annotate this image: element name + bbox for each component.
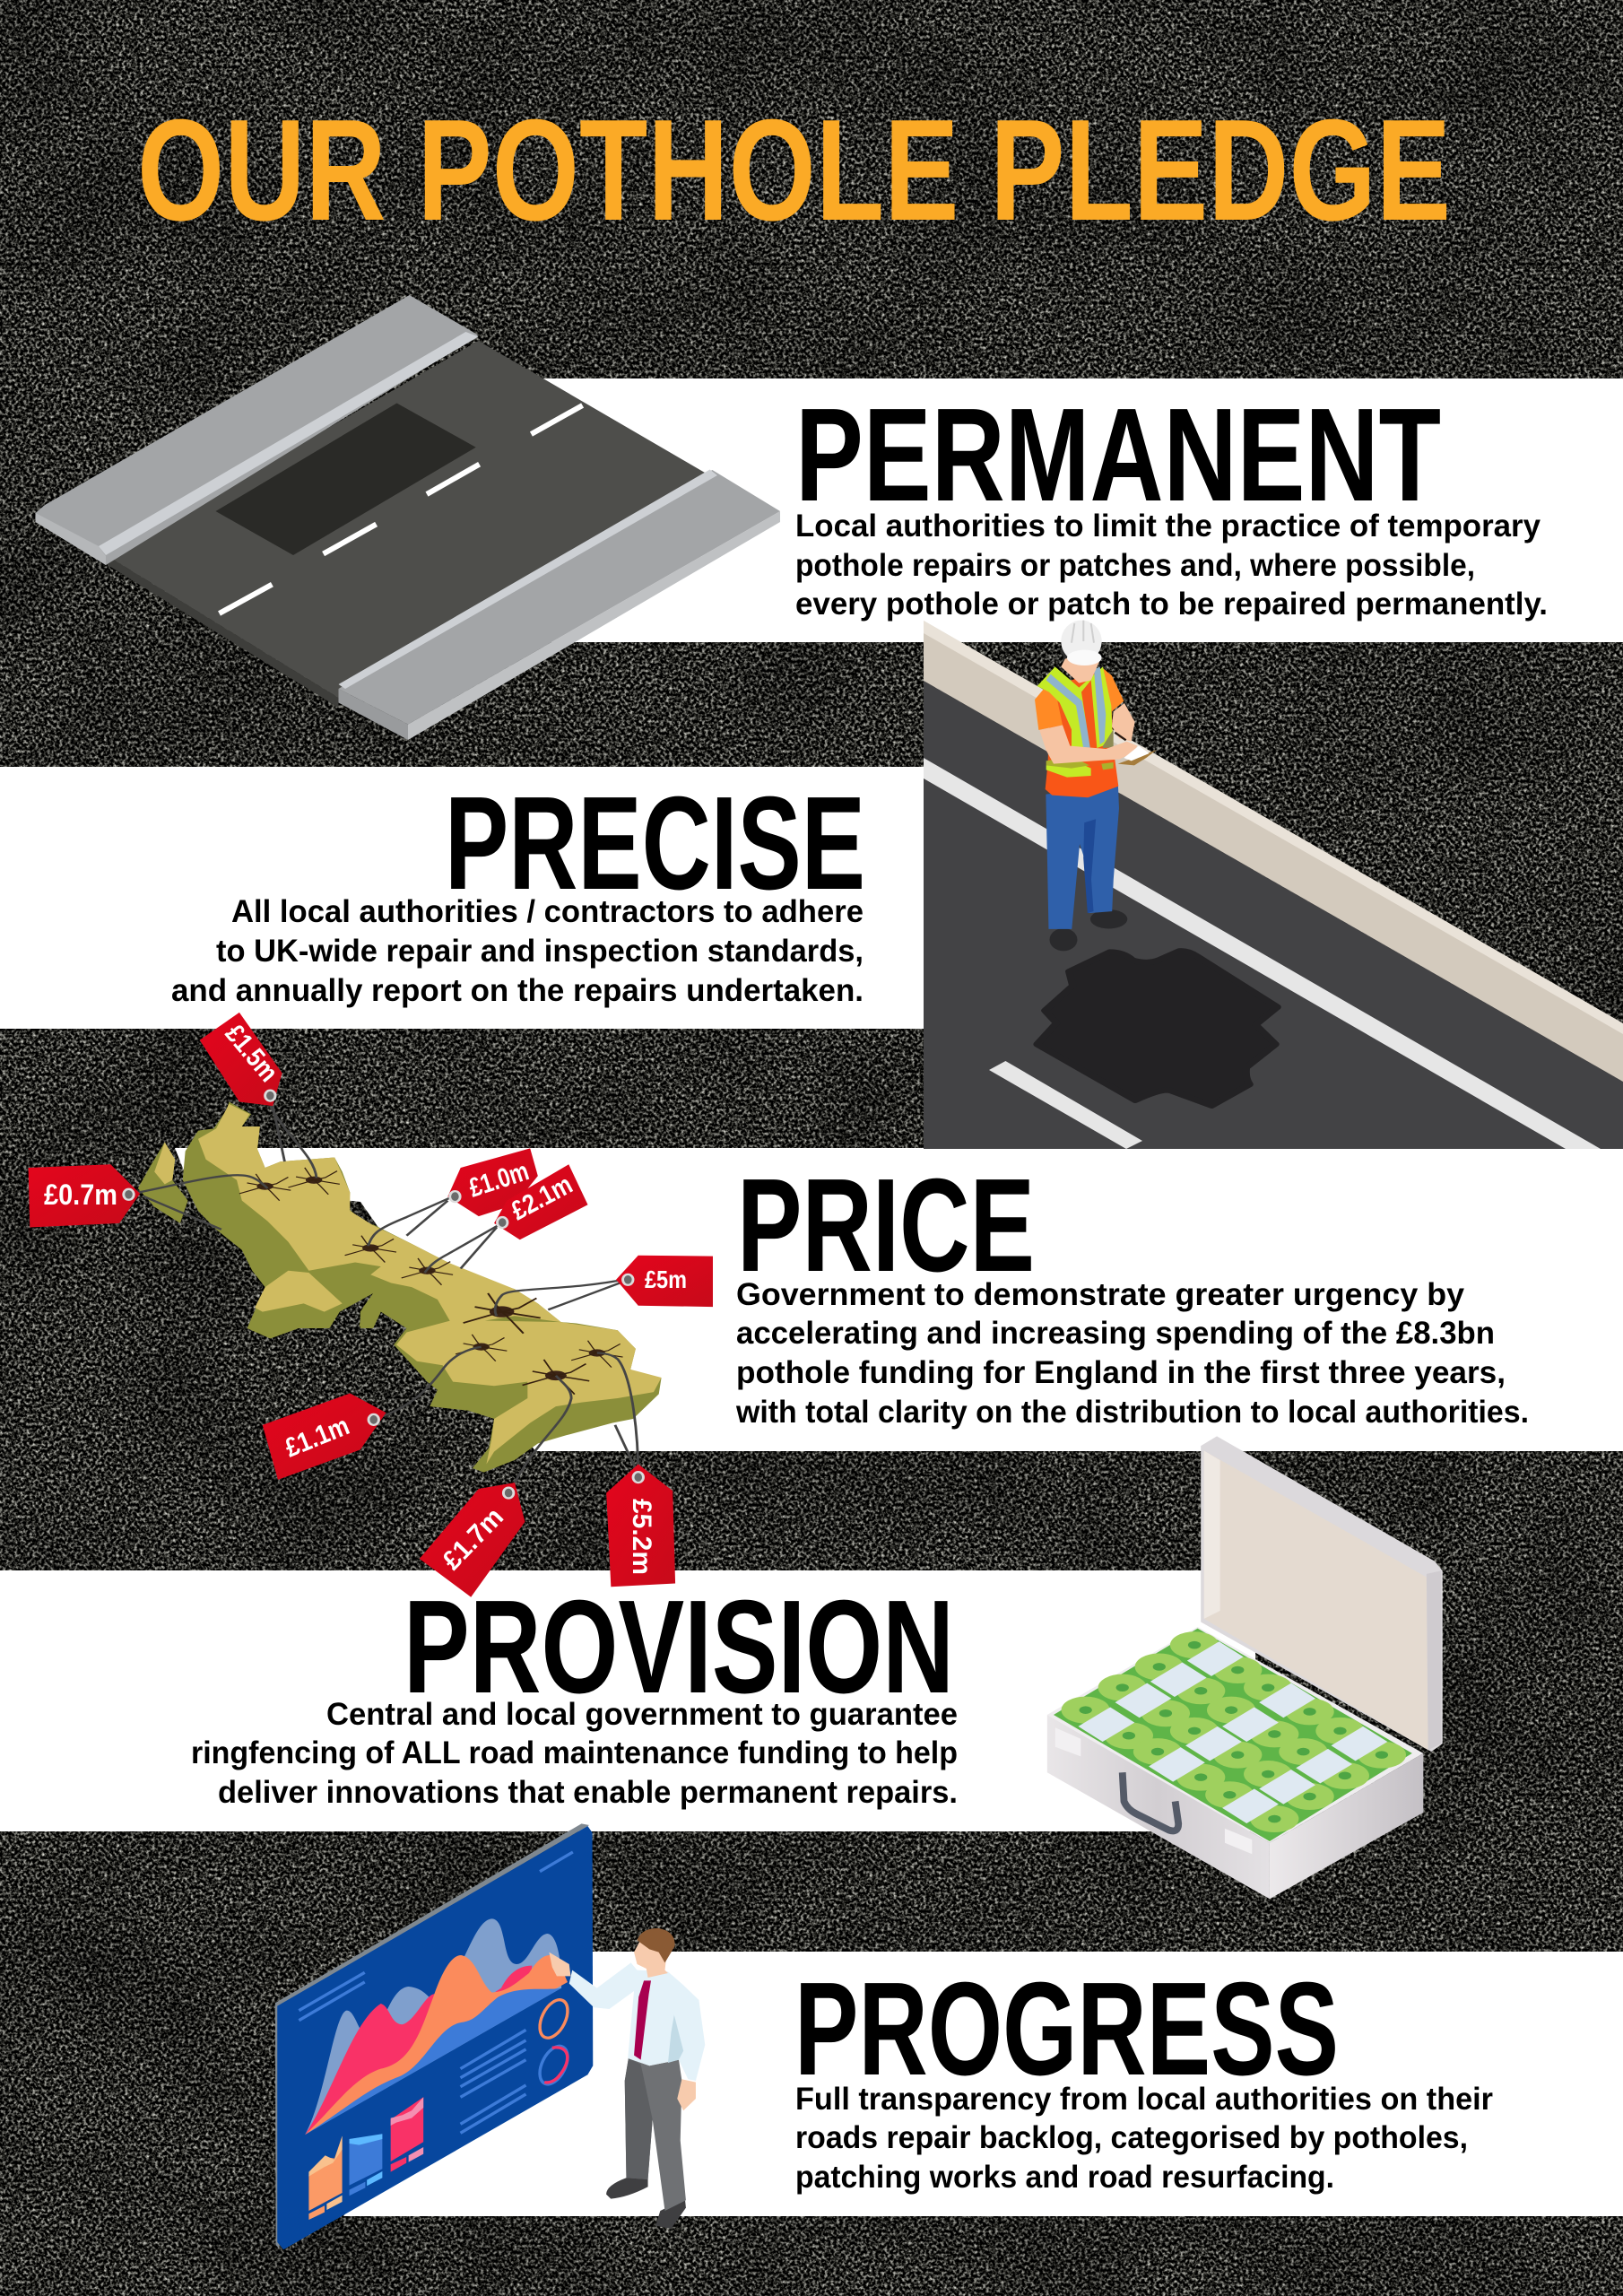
- tag eyelets: [124, 1091, 643, 1499]
- price tag labels: £5m: [645, 1265, 687, 1293]
- text: progress body: [795, 2082, 1493, 2195]
- text: precise body: and annually report on the repairs undertaken.: [171, 973, 864, 1008]
- case lid: [1201, 1436, 1443, 1752]
- tag strings: [129, 1106, 638, 1493]
- map: outer hebrides: [138, 1143, 188, 1223]
- case base: [1047, 1627, 1423, 1843]
- money: [1054, 1629, 1412, 1841]
- dashboard screen: [275, 1823, 593, 2249]
- price tag shapes: [29, 1013, 713, 1597]
- presenter: [549, 1928, 705, 2229]
- mini charts: [308, 2097, 423, 2220]
- text: progress body: roads repair backlog, categorised by potholes,: [795, 2120, 1468, 2155]
- text: permanent body: every pothole or patch to be repaired permanently.: [795, 587, 1548, 622]
- text: precise body: to UK-wide repair and inspection standards,: [216, 934, 864, 969]
- price tag labels: £5.2m: [627, 1499, 656, 1575]
- price tag labels: £0.7m: [44, 1178, 117, 1211]
- road: [924, 681, 1623, 1149]
- illustration: UK map with price tags: [29, 1013, 713, 1597]
- panel: permanent: [538, 378, 1623, 642]
- text: provision body: ringfencing of ALL road maintenance funding to help: [191, 1735, 958, 1770]
- heading: provision: PROVISION: [404, 1573, 954, 1721]
- text: precise body: [171, 894, 864, 1008]
- text: price body: [735, 1277, 1529, 1430]
- text: permanent body: [795, 509, 1548, 622]
- heading: progress: PROGRESS: [794, 1955, 1339, 2103]
- ring gauges: [534, 1996, 573, 2089]
- text: progress body: Full transparency from local authorities on their: [795, 2082, 1493, 2117]
- price tag labels: £1.5m: [220, 1019, 283, 1088]
- worker: [1035, 621, 1157, 951]
- road dashes: [219, 405, 583, 613]
- patch: [215, 404, 476, 555]
- text: price body: with total clarity on the distribution to local authorities.: [735, 1395, 1529, 1430]
- illustration: presenter at dashboard screen: [275, 1823, 705, 2249]
- worker legs: [1046, 786, 1127, 951]
- panel: precise: [0, 767, 933, 1029]
- text: permanent body: pothole repairs or patches and, where possible,: [795, 548, 1475, 583]
- panel: provision: [0, 1570, 1255, 1831]
- text: provision body: deliver innovations that enable permanent repairs.: [218, 1775, 958, 1810]
- area chart: [305, 1918, 568, 2135]
- price tag labels: [44, 1019, 687, 1576]
- illustration: road inspector and pothole: [924, 621, 1623, 1149]
- map: cracks: [239, 1168, 623, 1395]
- map: great britain and ireland: [183, 1102, 662, 1473]
- heading: price: PRICE: [737, 1152, 1035, 1300]
- worker torso: [1035, 621, 1157, 797]
- panel: progress: [343, 1952, 1623, 2216]
- text: price body: pothole funding for England in the first three years,: [736, 1355, 1506, 1390]
- heading: precise: PRECISE: [445, 770, 865, 918]
- pothole: [1037, 951, 1278, 1106]
- text: permanent body: Local authorities to limit the practice of temporary: [795, 509, 1541, 544]
- text: provision body: Central and local government to guarantee: [326, 1697, 958, 1732]
- price tag labels: £2.1m: [507, 1170, 577, 1226]
- text lines: [299, 1852, 573, 2133]
- text: provision body: [191, 1697, 958, 1810]
- kerb: [924, 621, 1623, 1082]
- illustration: road section with patch: [36, 295, 780, 740]
- text: price body: Government to demonstrate greater urgency by: [736, 1277, 1465, 1312]
- price tag labels: £1.0m: [465, 1156, 533, 1204]
- text: precise body: All local authorities / contractors to adhere: [231, 894, 864, 929]
- text: price body: accelerating and increasing spending of the £8.3bn: [736, 1316, 1495, 1351]
- price tag labels: £1.7m: [437, 1502, 509, 1576]
- heading: permanent: PERMANENT: [795, 381, 1441, 529]
- case handle: [1123, 1772, 1178, 1831]
- case clasps: [1055, 1727, 1252, 1854]
- illustration: briefcase full of money: [1047, 1436, 1443, 1899]
- panel: price: [175, 1148, 1623, 1451]
- text: progress body: patching works and road resurfacing.: [795, 2160, 1334, 2195]
- lane line: [924, 758, 1601, 1149]
- price tag labels: £1.1m: [281, 1411, 353, 1463]
